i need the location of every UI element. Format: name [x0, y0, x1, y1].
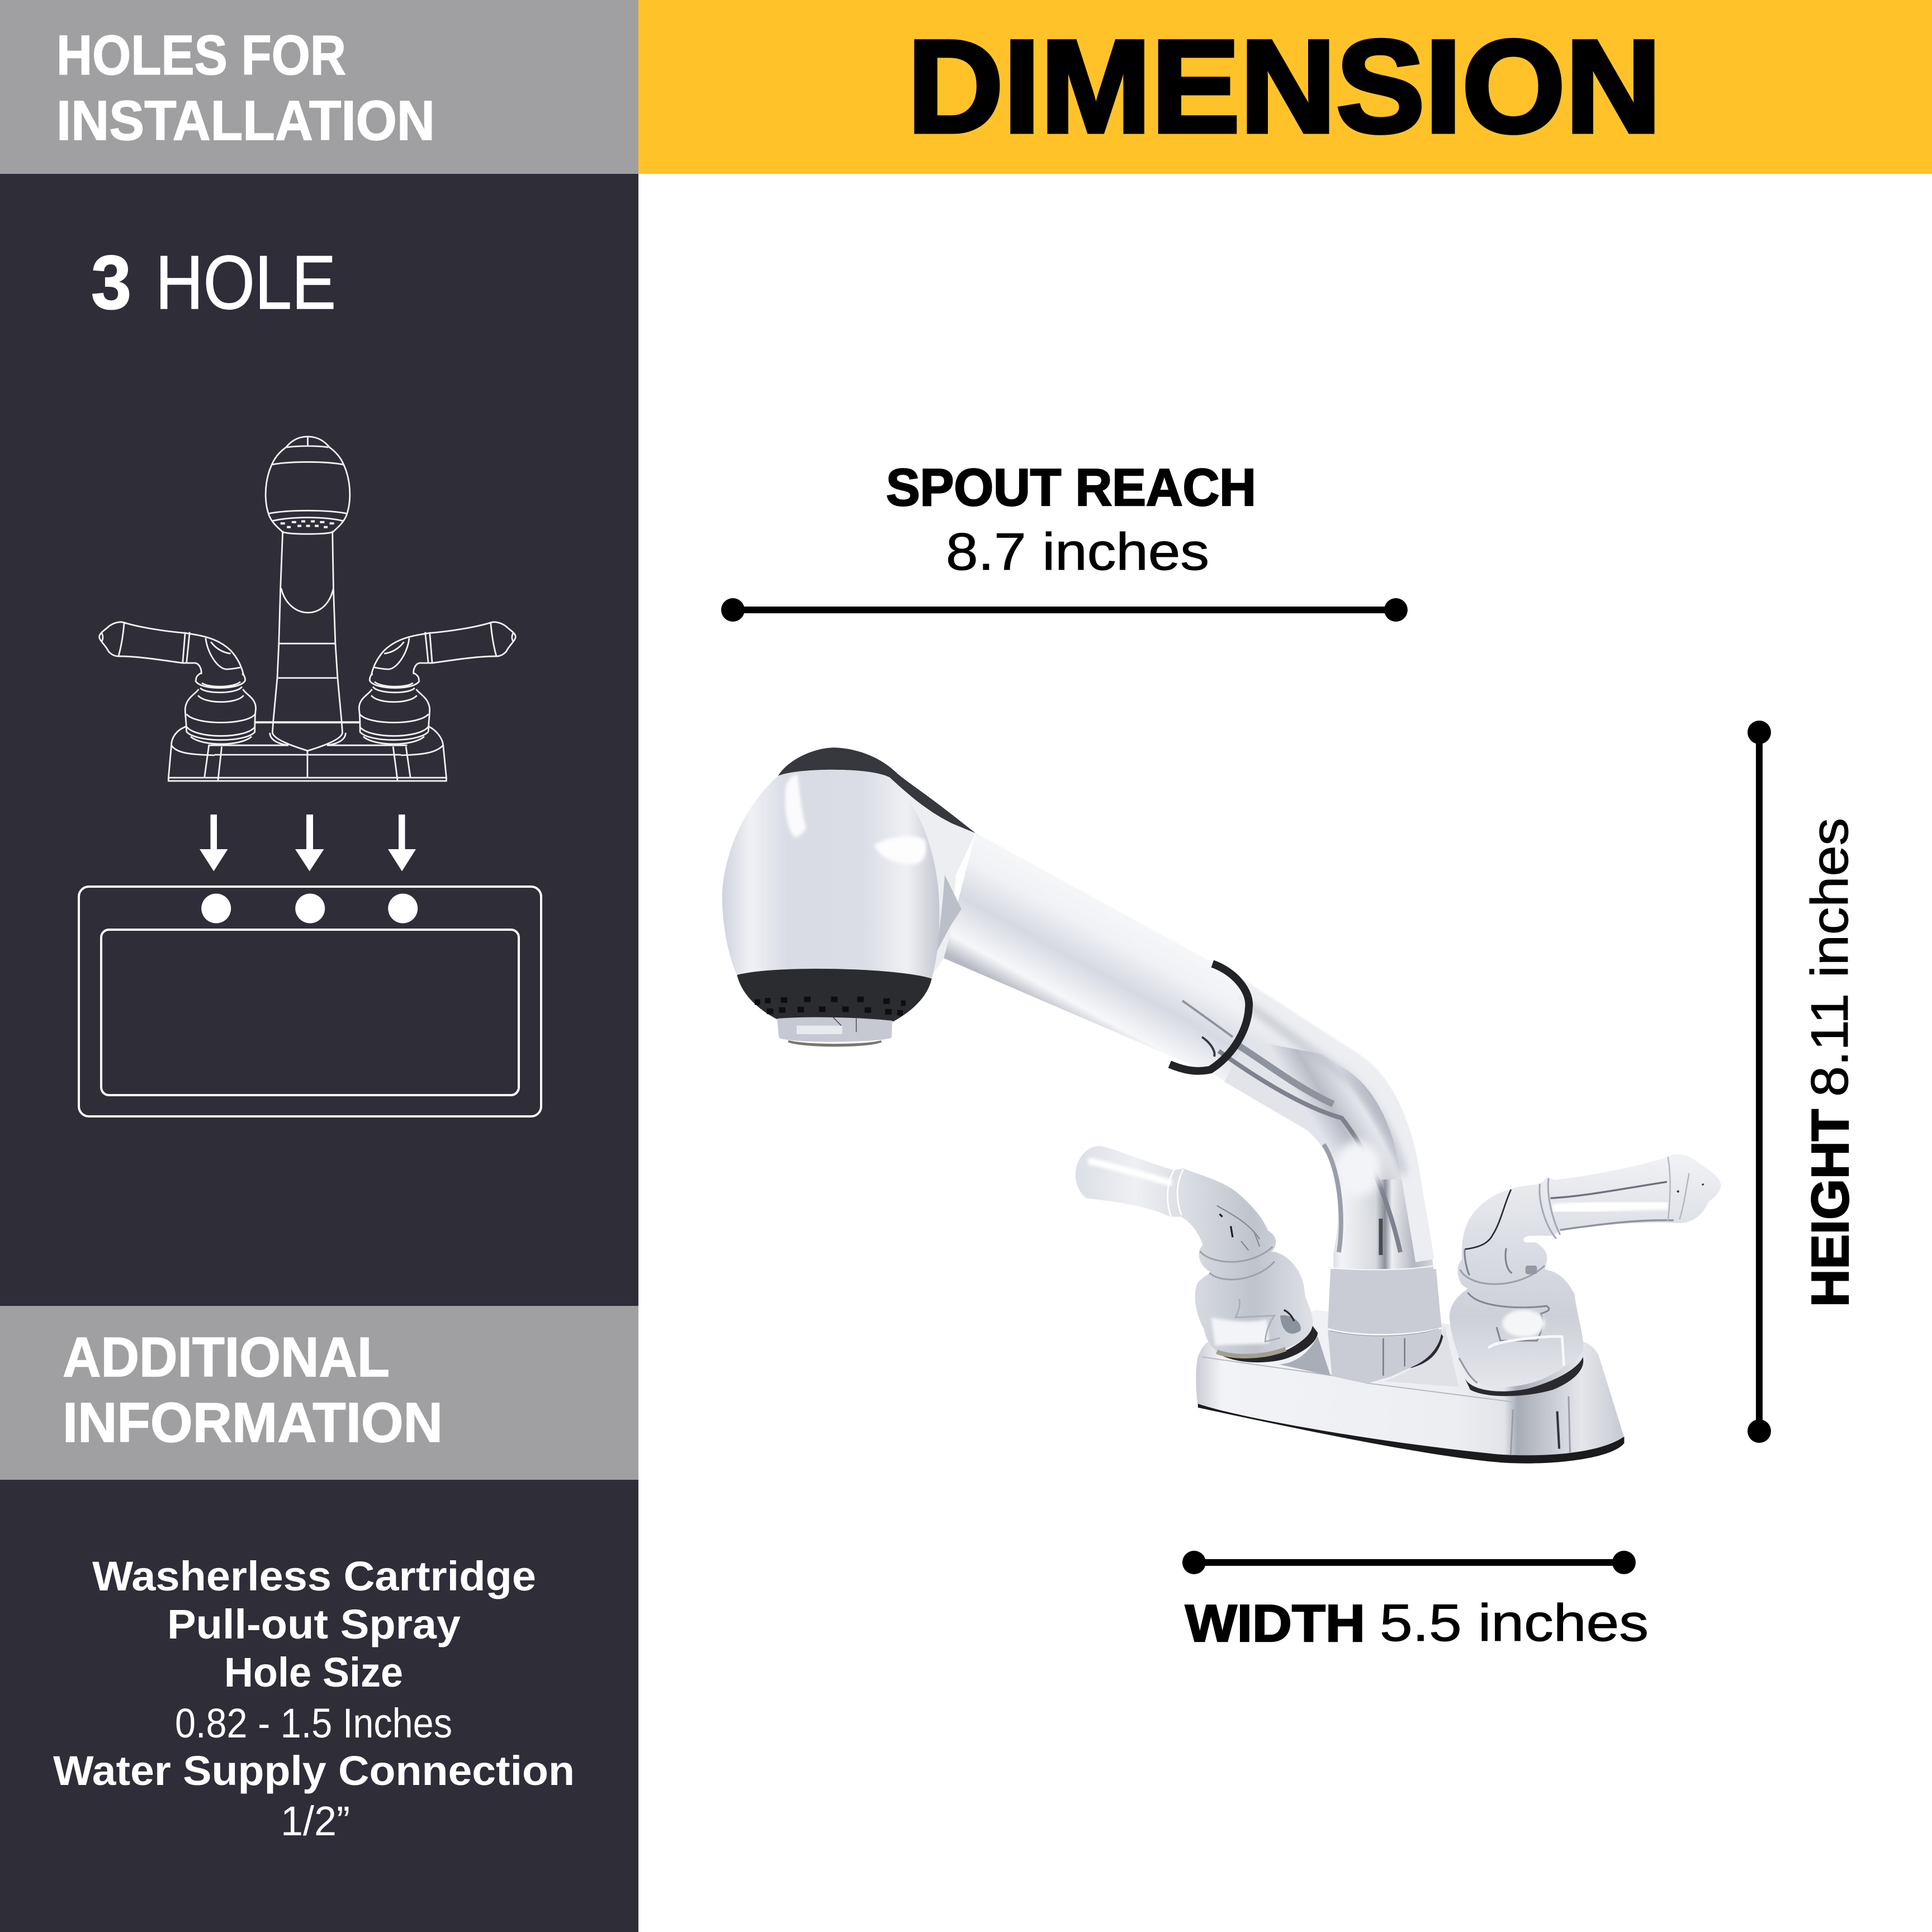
- sub-element: spray head: [722, 747, 976, 1045]
- panel: additional information header: [0, 1306, 638, 1480]
- sub-element: black spout ring: [1169, 964, 1249, 1071]
- text block: additional information list: Water Supply Connection: [53, 1748, 575, 1794]
- arrow: width dimension line: [1182, 1551, 1636, 1574]
- heading: holes for installation: HOLES FOR: [56, 24, 346, 87]
- text block: additional information list: Pull-out Spray: [167, 1601, 461, 1647]
- sub-element: left handle: [1076, 1146, 1313, 1356]
- panel: left dark background: [0, 174, 638, 1932]
- panel: dimension header: [638, 0, 1932, 174]
- arrow: height dimension line: [1748, 721, 1771, 1443]
- label: height: 8.11 inches: [1800, 818, 1859, 1097]
- heading: additional information: INFORMATION: [63, 1391, 443, 1454]
- heading: additional information: ADDITIONAL: [63, 1326, 390, 1389]
- label: width: [1185, 1593, 1649, 1652]
- title: dimension: DIMENSION: [907, 13, 1661, 160]
- text block: additional information list: Hole Size: [224, 1649, 403, 1696]
- sub-element: deck base: [1196, 1310, 1624, 1464]
- label: width: 5.5 inches: [1380, 1593, 1649, 1652]
- label: height: HEIGHT: [1801, 1109, 1859, 1307]
- icon: three down arrows: [200, 815, 416, 871]
- sub-element: column: [1328, 1265, 1442, 1383]
- label: spout reach: SPOUT REACH: [886, 458, 1256, 517]
- text block: additional information list: [53, 1553, 575, 1844]
- sub-element: right handle: [1450, 1154, 1721, 1387]
- label: spout reach: [886, 458, 1256, 581]
- heading: holes for installation: INSTALLATION: [56, 89, 435, 152]
- icon: faucet line drawing: [99, 437, 515, 781]
- image: chrome pull-out faucet: [722, 747, 1721, 1464]
- text: 3 hole: [91, 240, 336, 325]
- sub-element: right handle: [359, 622, 515, 744]
- text block: additional information list: 0.82 - 1.5 Inches: [175, 1700, 452, 1746]
- sub-element: valve rings: [1215, 1325, 1318, 1362]
- text: 3 hole: HOLE: [155, 240, 336, 325]
- sub-element: spout tube: [944, 833, 1434, 1277]
- label: width: WIDTH: [1185, 1594, 1365, 1652]
- label: spout reach: 8.7 inches: [946, 522, 1209, 581]
- text block: additional information list: Washerless Cartridge: [92, 1553, 536, 1599]
- sub-element: left handle: [99, 622, 256, 744]
- arrow: spout reach dimension line: [721, 598, 1408, 622]
- panel: holes for installation header: [0, 0, 638, 174]
- text block: additional information list: 1/2”: [281, 1798, 350, 1844]
- icon: sink top with three holes: [79, 887, 541, 1116]
- label: height: [1800, 818, 1859, 1307]
- text: 3 hole: 3: [91, 240, 131, 325]
